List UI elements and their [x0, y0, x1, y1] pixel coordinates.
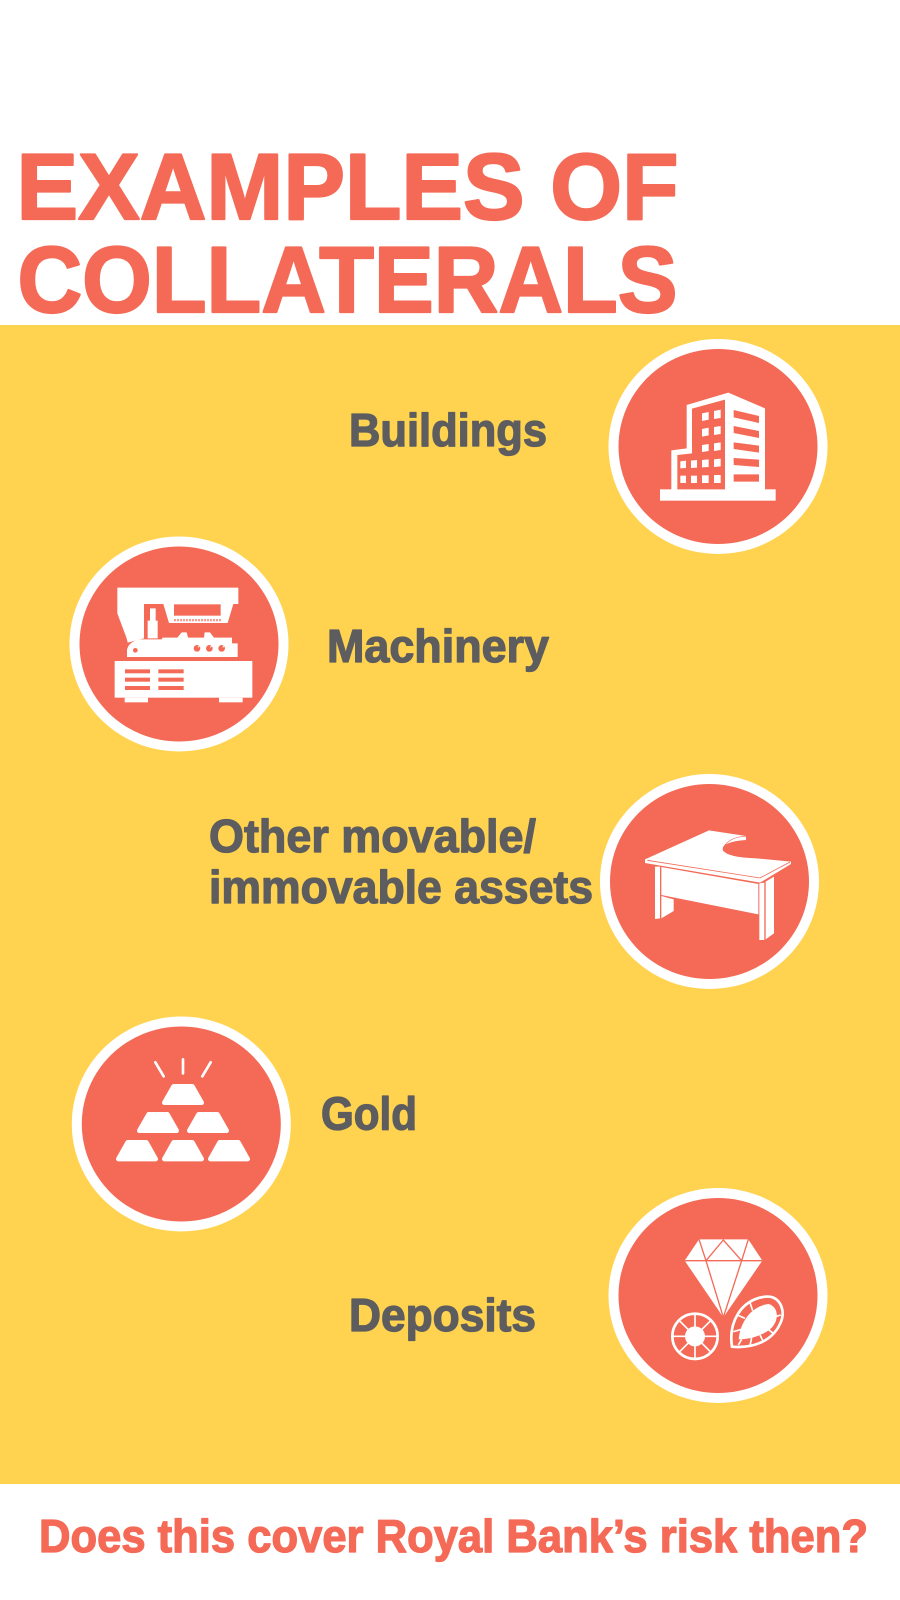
- panel: yellow collateral band: [0, 325, 900, 1484]
- label: Other movable/immovable assets: [209, 810, 593, 913]
- title: EXAMPLES OF: [16, 134, 678, 239]
- label: Buildings: Buildings: [349, 404, 547, 456]
- icon: office desk: [600, 774, 819, 989]
- label: Other movable/immovable assets: Other movable/: [209, 810, 536, 862]
- title: COLLATERALS: [18, 227, 678, 332]
- title: [16, 134, 678, 332]
- icon: gems: [608, 1188, 828, 1403]
- label: Machinery: Machinery: [327, 620, 549, 672]
- label: Gold: Gold: [321, 1088, 417, 1140]
- icon: machinery: [70, 536, 288, 752]
- label: Other movable/immovable assets: immovable assets: [209, 861, 593, 913]
- icon: buildings: [608, 339, 828, 554]
- closing question: Does this cover Royal Bank’s risk then?: [39, 1510, 868, 1562]
- icon: gold bars: [72, 1016, 291, 1232]
- label: Deposits: Deposits: [349, 1289, 536, 1341]
